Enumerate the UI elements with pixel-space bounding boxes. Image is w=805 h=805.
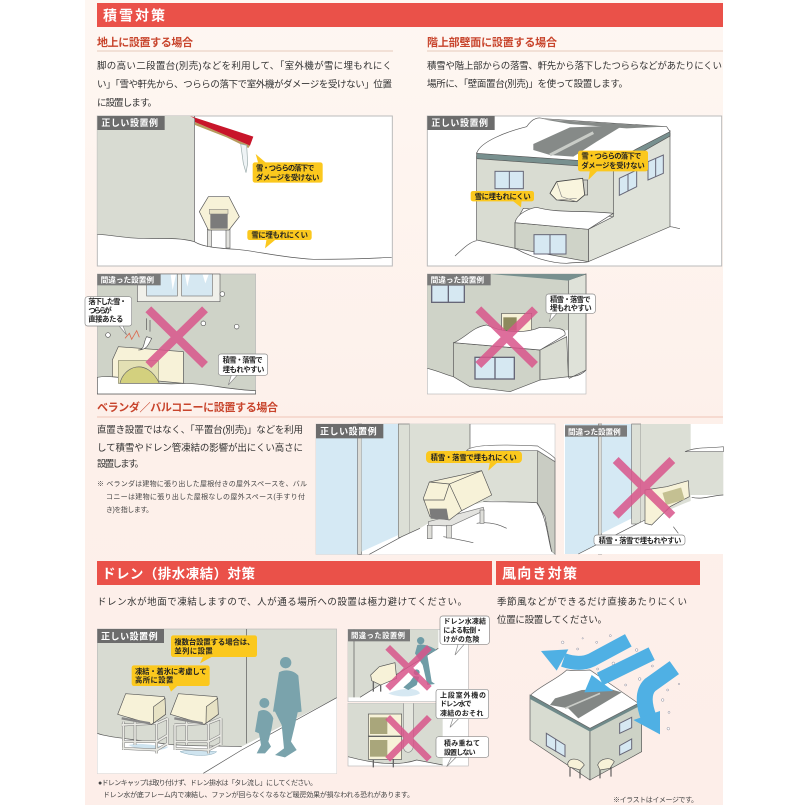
text block: drain footnote: ドレン水が底フレーム内で凍結し、ファンが回らなくなるなど暖房効果が損なわれる恐れがあります。	[103, 790, 414, 799]
text block: ground installation: に設置します。	[97, 98, 157, 109]
section: drain freeze header	[97, 561, 492, 585]
arrow: wind over roof	[541, 640, 628, 671]
section: snow countermeasures header: 積雪対策	[103, 8, 165, 24]
text block: veranda / balcony: 設置します。	[97, 459, 144, 470]
panel: ground correct example	[97, 116, 392, 266]
text block: veranda / balcony: して積雪やドレン管凍結の影響が出にくい高さに	[97, 442, 303, 454]
icon: units near the house	[568, 759, 614, 778]
panel: veranda correct example	[316, 424, 555, 554]
callout: do not stack: 積み重ねて	[444, 738, 480, 747]
section: snow countermeasures header	[97, 3, 723, 27]
panel: drain wrong example upper	[348, 616, 489, 702]
arrow: wind toward roof	[584, 654, 652, 692]
icon: X wrong mark	[388, 717, 429, 759]
text block: veranda / balcony: ベランダ／バルコニーに設置する場合	[97, 400, 278, 414]
text block: ground installation: い」「雪や軒先から、つららの落下で室外機がダメージを受けない」位置	[97, 78, 392, 90]
icon: outdoor unit on tall stand	[199, 197, 239, 248]
text block: drain intro: ドレン水が地面で凍結しますので、人が通る場所への設置は極力避けてください。	[97, 596, 467, 608]
callout: easily buried	[218, 354, 268, 385]
panel: ground correct example: 正しい設置例	[101, 117, 158, 128]
panel: upper wall correct example: 正しい設置例	[431, 117, 488, 128]
icon: adult and child silhouettes	[255, 657, 302, 757]
text block: veranda / balcony: ※ ベランダは建物に張り出した屋根付きの屋外スペースを、バル	[97, 479, 307, 488]
callout: high position: 凍結・着氷に考慮して	[135, 667, 207, 676]
text block: upper wall installation	[427, 35, 723, 90]
panel: drain correct example: 正しい設置例	[101, 630, 158, 641]
callout: not buried by snow: 雪に埋もれにくい	[475, 192, 531, 201]
callout: do not stack	[436, 737, 489, 767]
callout: parallel installation	[171, 635, 257, 663]
text block: veranda / balcony	[97, 400, 723, 514]
callout: slip danger	[440, 616, 489, 655]
callout: easily buried: 積雪・落雪で埋もれやすい	[599, 536, 681, 545]
callout: not buried by snow	[247, 230, 312, 248]
panel: ground wrong example: 間違った設置例	[101, 275, 154, 285]
text block: ground installation	[97, 35, 393, 109]
callout: easily buried: 埋もれやすい	[550, 304, 592, 313]
callout: easily buried: 積雪・落雪で	[223, 355, 263, 364]
callout: falling snow hits directly: 落下した雪・	[88, 297, 127, 306]
panel: veranda wrong example: 間違った設置例	[568, 426, 621, 436]
text block: veranda / balcony: コニーは建物に張り出した屋根なしの屋外スペース(手すり付	[106, 492, 305, 501]
icon: snow particles	[561, 635, 680, 730]
icon: X wrong mark	[388, 647, 429, 688]
text block: drain footnote: ●ドレンキャップは取り付けず、ドレン排水は「タレ流し」にしてください。	[98, 778, 317, 787]
callout: avoids falling-snow damage	[253, 154, 323, 183]
text block: veranda / balcony: 直置き設置ではなく、「平置台(別売)」などを利用	[97, 424, 303, 436]
callout: avoids falling-snow damage: ダメージを受けない	[581, 161, 645, 170]
icon: X wrong mark	[478, 309, 535, 365]
section: wind direction header: 風向き対策	[502, 566, 577, 582]
callout: easily buried: 積雪・落雪で	[550, 295, 591, 304]
panel: upper wall wrong example: 間違った設置例	[431, 275, 484, 285]
callout: do not stack: 設置しない	[444, 748, 476, 757]
text block: drain footnote	[98, 778, 414, 799]
panel: drain wrong example lower	[348, 689, 489, 767]
text block: wind intro: 位置に設置してください。	[497, 614, 607, 626]
text block: wind intro: 季節風などができるだけ直接あたりにくい	[497, 596, 687, 608]
text block: upper wall installation: 場所に、「壁面置台(別売)」を使って設置します。	[427, 78, 628, 90]
panel: upper wall correct example	[427, 116, 722, 266]
icon: outdoor unit on flat stand	[423, 471, 492, 539]
panel: upper wall wrong example	[427, 274, 595, 394]
text block: ground installation: 脚の高い二段置台(別売)などを利用して、「室外機が雪に埋もれにく	[97, 60, 392, 72]
callout: upper unit drain freezing	[436, 689, 489, 727]
text block: illustration note: ※イラストはイメージです。	[613, 796, 698, 804]
callout: upper unit drain freezing: ドレン水で	[440, 699, 472, 708]
callout: falling snow hits directly: つららが	[88, 306, 112, 315]
text block: upper wall installation: 積雪や階上部からの落雪、軒先から落下したつららなどがあたりにくい	[427, 60, 722, 72]
callout: falling snow hits directly: 直接あたる	[88, 315, 123, 324]
text block: wind intro	[497, 596, 687, 626]
callout: high position	[132, 665, 210, 692]
callout: easily buried: 埋もれやすい	[223, 365, 264, 374]
callout: not buried by snow: 雪に埋もれにくい	[251, 231, 308, 240]
section: drain freeze header: ドレン（排水凍結）対策	[102, 566, 256, 582]
callout: upper unit drain freezing: 上段室外機の	[440, 690, 486, 699]
callout: falling snow hits directly	[85, 297, 132, 335]
callout: easily buried	[546, 294, 595, 322]
section: wind direction header	[496, 561, 700, 585]
panel: drain correct example	[97, 629, 337, 773]
text block: veranda / balcony: き)を指します。	[106, 505, 153, 514]
callout: parallel installation: 並列に設置	[174, 646, 213, 655]
callout: high position: 高所に設置	[135, 676, 174, 685]
callout: upper unit drain freezing: 凍結のおそれ	[440, 708, 483, 717]
callout: slip danger: ドレン水凍結	[443, 617, 486, 626]
icon: buried outdoor unit	[645, 481, 689, 525]
callout: avoids falling-snow damage: ダメージを受けない	[256, 173, 319, 182]
icon: windows	[546, 717, 632, 757]
icon: unit and slipping people	[371, 637, 437, 696]
illustration: house with wall-mounted unit	[455, 118, 680, 263]
callout: avoids falling-snow damage	[578, 151, 648, 180]
panel: drain wrong example upper: 間違った設置例	[351, 631, 405, 640]
callout: slip danger: けがの危険	[443, 635, 479, 644]
icon: unit hit by falling snow	[112, 318, 183, 383]
arrow: wind down the side	[633, 668, 674, 734]
callout: slip danger: による転倒・	[443, 626, 483, 635]
icon: X wrong mark	[616, 460, 672, 516]
icon: stacked units	[368, 714, 402, 767]
icon: X wrong mark	[148, 309, 205, 365]
callout: avoids falling-snow damage: 雪・つららの落下で	[256, 164, 314, 173]
callout: parallel installation: 複数台設置する場合は、	[174, 637, 254, 646]
text block: ground installation: 地上に設置する場合	[97, 35, 193, 49]
illustration: house with wind arrows	[530, 635, 680, 780]
callout: not buried: 積雪・落雪で埋もれにくい	[431, 453, 517, 462]
callout: not buried by snow	[471, 191, 534, 207]
text block: upper wall installation: 階上部壁面に設置する場合	[427, 35, 557, 49]
background panel	[85, 0, 723, 805]
callout: avoids falling-snow damage: 雪・つららの落下で	[581, 152, 641, 161]
panel: veranda wrong example	[564, 424, 723, 554]
panel: ground wrong example	[85, 274, 268, 394]
callout: not buried	[426, 451, 522, 471]
panel: veranda correct example: 正しい設置例	[320, 425, 377, 436]
icon: two outdoor units on stands	[118, 694, 221, 755]
